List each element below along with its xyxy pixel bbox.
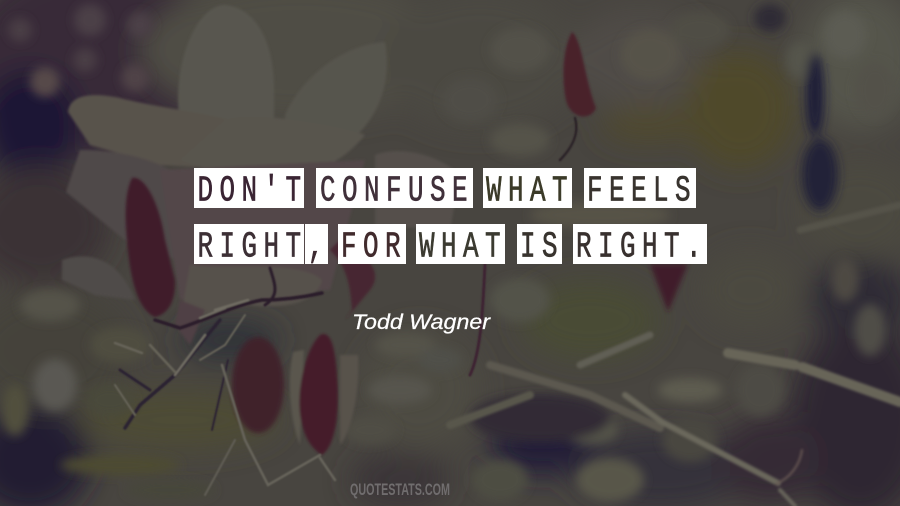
word: CONFUSE: CONFUSE	[320, 172, 474, 212]
dark and light twigs	[115, 118, 576, 495]
watermark: QUOTESTATS.COM	[350, 480, 450, 499]
magnolia flower petals	[62, 5, 460, 320]
magnolia buds	[126, 32, 596, 455]
word: WHAT: WHAT	[486, 172, 574, 212]
author name: Todd Wagner	[352, 311, 491, 334]
word: RIGHT.: RIGHT.	[576, 228, 708, 268]
word: WHAT: WHAT	[419, 228, 507, 268]
word: FEELS: FEELS	[587, 172, 697, 212]
word: DON'T: DON'T	[198, 172, 308, 212]
word: FOR: FOR	[341, 228, 407, 268]
word: RIGHT: RIGHT	[198, 228, 308, 268]
quote: line two	[194, 224, 708, 268]
pale blurred branches	[450, 205, 900, 506]
quote: line one	[194, 168, 697, 212]
comma: ,	[308, 228, 330, 268]
word: IS: IS	[520, 228, 564, 268]
